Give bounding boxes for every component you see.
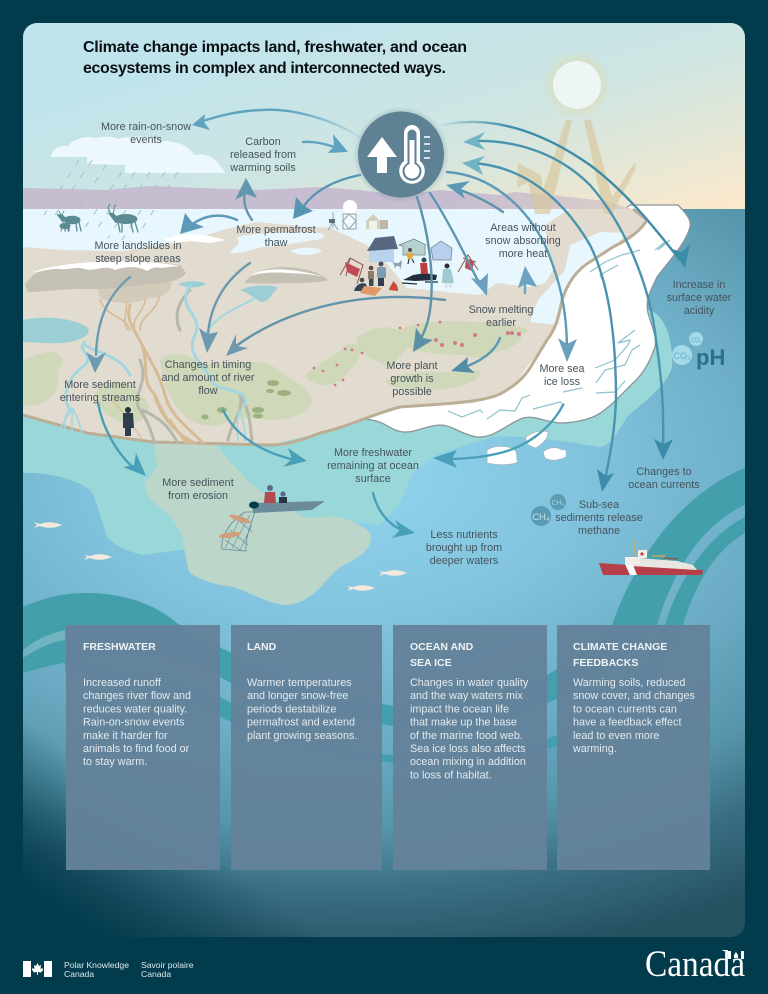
label: surface acidity: surface water — [667, 292, 732, 304]
label: carbon: warming soils — [229, 162, 296, 174]
ice floes — [487, 431, 566, 465]
label: freshwater: More freshwater — [334, 447, 412, 459]
label: sea ice loss: More sea — [539, 363, 585, 375]
panel: ocean and sea ice: ocean mixing in addition — [410, 756, 526, 768]
panel: freshwater: FRESHWATER — [83, 641, 156, 653]
arrow: warming to river flow — [226, 297, 445, 356]
icon: thermometer — [399, 125, 430, 184]
sun beams — [517, 120, 636, 214]
shallow water zone — [23, 310, 672, 555]
arrow: areas without snow to warming — [446, 181, 503, 212]
label: freshwater: surface — [355, 473, 391, 485]
arrow: permafrost to carbon — [235, 178, 257, 220]
methane bubbles: CH₄ — [532, 512, 550, 523]
arrows — [86, 110, 690, 538]
arrow: methane feedback — [462, 156, 616, 492]
fish — [34, 522, 407, 591]
label: areas without snow: Areas without — [490, 222, 556, 234]
coastline — [23, 209, 647, 445]
label: methane: sediments release — [555, 512, 643, 524]
land — [23, 209, 647, 445]
panel: freshwater: Increased runoff — [83, 677, 162, 689]
label: permafrost: thaw — [265, 237, 288, 249]
arrow: streams to erosion — [98, 403, 146, 476]
arrow: warming to rain-on-snow — [192, 110, 360, 137]
grey rivers — [137, 290, 252, 443]
research ship — [599, 540, 703, 575]
vegetation patches — [23, 321, 527, 426]
arrow: snow melting to plant growth — [451, 338, 500, 373]
panel: freshwater: reduces water quality. — [83, 703, 187, 715]
rain — [44, 160, 178, 240]
snowmobile — [402, 258, 438, 284]
arrow: river flow to freshwater — [223, 410, 307, 467]
logo: Canada wordmark: Canada — [645, 944, 745, 985]
panel: climate change feedbacks: have a feedback effect — [573, 717, 681, 729]
caribou — [58, 204, 138, 232]
label: areas without snow: snow absorbing — [485, 235, 561, 247]
label: snow melting: earlier — [486, 317, 516, 329]
title: Climate change impacts land, freshwater, and ocean — [83, 39, 467, 56]
panel: freshwater — [66, 625, 220, 870]
panel: ocean and sea ice: and the way waters mix — [410, 690, 523, 702]
snow patches on land — [163, 232, 324, 255]
panel: land: and longer snow-free — [247, 690, 348, 702]
label: sea ice loss: ice loss — [544, 376, 581, 388]
arrow: freshwater to nutrients — [373, 493, 415, 538]
panel: climate change feedbacks: warming. — [572, 743, 617, 755]
people by the fire — [354, 262, 398, 296]
sea ice — [340, 205, 690, 437]
panel: ocean and sea ice: of the marine food web. — [410, 730, 523, 742]
clouds — [51, 137, 225, 173]
label: sediment in streams: entering streams — [60, 392, 141, 404]
label: freshwater: remaining at ocean — [327, 460, 419, 472]
arrow: permafrost to river flow — [199, 263, 250, 353]
panel: climate change feedbacks: snow cover, and changes — [573, 690, 695, 702]
label: plant growth: More plant — [386, 360, 438, 372]
thermometer badge — [353, 106, 449, 202]
distant mountains — [23, 186, 632, 209]
arrow: warming and surface water acidity — [443, 122, 690, 268]
caribou left — [58, 211, 81, 231]
house with solar panels — [367, 236, 398, 262]
panel: climate change feedbacks: FEEDBACKS — [573, 657, 638, 669]
panel: ocean and sea ice: Changes in water quality — [410, 677, 529, 689]
panel: ocean and sea ice: OCEAN AND — [410, 641, 474, 653]
hunter with spear — [111, 397, 143, 440]
sky — [23, 23, 745, 209]
panel: climate change feedbacks: Warming soils, reduced — [573, 677, 685, 689]
icon: up arrow — [367, 137, 397, 173]
title: ecosystems in complex and interconnected ways. — [83, 60, 446, 77]
fish net — [219, 512, 255, 551]
panel: climate change feedbacks: to ocean currents can — [573, 703, 677, 715]
panel: freshwater: changes river flow and — [83, 690, 191, 702]
arrow: ocean currents feedback — [463, 132, 673, 460]
methane bubbles: CH₄ — [552, 500, 565, 507]
blue rivers — [58, 285, 255, 441]
person in parka — [442, 264, 454, 288]
arrow: warming to snow melting — [430, 193, 488, 296]
caribou right — [108, 204, 138, 232]
label: plant growth: growth is — [390, 373, 434, 385]
panel: freshwater: Rain-on-snow events — [83, 717, 185, 729]
logo: Polar Knowledge Canada: Canada — [141, 969, 171, 979]
panel: land — [231, 625, 382, 870]
panel: ocean and sea ice: Sea ice loss also affects — [410, 743, 526, 755]
label: rain-on-snow: More rain-on-snow — [101, 121, 191, 133]
label: river flow: flow — [198, 385, 218, 397]
CO2 and pH icon: pH — [696, 345, 725, 370]
sun — [546, 54, 608, 116]
label: river flow: and amount of river — [161, 372, 255, 384]
panel: land: Warmer temperatures — [247, 677, 352, 689]
research station — [328, 200, 388, 230]
methane bubbles — [531, 494, 566, 526]
panel: climate change feedbacks: lead to even more — [573, 730, 659, 742]
labels — [60, 121, 732, 567]
logo: Polar Knowledge Canada: Canada — [64, 969, 94, 979]
label: methane: methane — [578, 525, 620, 537]
arrow: warming to plant growth — [413, 197, 433, 352]
label: ocean currents: Changes to — [636, 466, 692, 478]
panel: ocean and sea ice: SEA ICE — [410, 657, 452, 669]
logo: Polar Knowledge Canada: Polar Knowledge — [64, 960, 129, 970]
label: nutrients: deeper waters — [430, 555, 499, 567]
snow cover — [23, 209, 627, 325]
label: areas without snow: more heat — [499, 248, 547, 260]
panel: freshwater: animals to find food or — [83, 743, 190, 755]
panel: ocean and sea ice: that make up the base — [410, 717, 517, 729]
label: erosion: More sediment — [162, 477, 234, 489]
panel: freshwater: make it harder for — [83, 730, 168, 742]
label: snow melting: Snow melting — [469, 304, 533, 316]
panel: climate change feedbacks — [557, 625, 710, 870]
boat and crew — [249, 485, 325, 513]
CO2 and pH icon: CO₂ — [690, 338, 702, 344]
panel: land: periods destabilize — [247, 703, 336, 715]
lakes — [23, 281, 278, 343]
tan sediment rivers — [100, 290, 203, 443]
shrubs — [202, 380, 291, 420]
ice cracks — [448, 240, 670, 419]
label: plant growth: possible — [392, 386, 432, 398]
arrow: sea ice to freshwater — [433, 405, 563, 468]
label: nutrients: Less nutrients — [430, 529, 498, 541]
lower corner shade — [23, 730, 280, 937]
panel: land: plant growing seasons. — [247, 730, 357, 742]
drying racks — [340, 255, 478, 284]
arrow: snow melting to areas without snow — [518, 266, 537, 293]
panel: climate change feedbacks: CLIMATE CHANGE — [573, 641, 667, 653]
child — [406, 248, 414, 264]
panel: ocean and sea ice — [393, 625, 547, 870]
panel: ocean and sea ice: impact the ocean life — [410, 703, 509, 715]
panel: land: LAND — [247, 641, 277, 653]
label: surface acidity: acidity — [684, 305, 715, 317]
logo: Polar Knowledge Canada — [23, 960, 194, 979]
label: rain-on-snow: events — [130, 134, 163, 146]
label: nutrients: brought up from — [426, 542, 502, 554]
dog — [392, 260, 402, 269]
rivers — [58, 285, 255, 443]
arrow: permafrost to landslides — [180, 213, 237, 234]
plant dots — [313, 321, 521, 386]
panel: ocean and sea ice: to loss of habitat. — [410, 769, 492, 781]
panel: land: permafrost and extend — [247, 717, 355, 729]
arrow: warming to sea ice loss — [447, 172, 577, 362]
arrow: warming to permafrost — [293, 175, 360, 219]
arrow: carbon to warming — [303, 134, 348, 153]
label: river flow: Changes in timing — [165, 359, 251, 371]
label: surface acidity: Increase in — [673, 279, 725, 291]
village — [340, 236, 478, 296]
panel: freshwater: to stay warm. — [83, 756, 147, 768]
label: ocean currents: ocean currents — [628, 479, 700, 491]
deep water waves — [23, 468, 745, 766]
label: carbon: released from — [230, 149, 296, 161]
CO2 and pH icon — [672, 332, 725, 370]
houses — [399, 239, 452, 260]
arrow: landslides to streams — [86, 277, 130, 373]
label: sediment in streams: More sediment — [64, 379, 136, 391]
ocean — [23, 209, 745, 937]
label: landslides: More landslides in — [94, 240, 182, 252]
label: carbon: Carbon — [245, 136, 281, 148]
label: erosion: from erosion — [168, 490, 228, 502]
CO2 and pH icon: CO₂ — [674, 351, 691, 361]
sediment plume — [145, 435, 371, 605]
hills — [25, 261, 328, 303]
label: permafrost: More permafrost — [236, 224, 316, 236]
label: methane: Sub-sea — [579, 499, 619, 511]
label: landslides: steep slope areas — [95, 253, 181, 265]
logo: Polar Knowledge Canada: Savoir polaire — [141, 960, 194, 970]
